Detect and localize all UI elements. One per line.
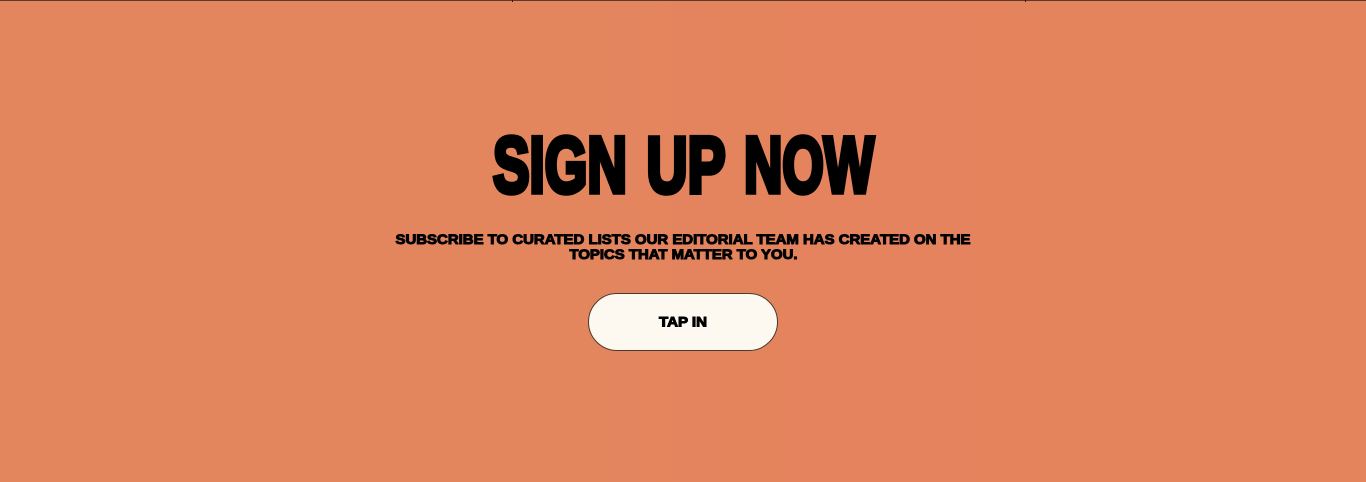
subtitle text — [396, 231, 970, 262]
title — [493, 120, 874, 209]
title: SIGN — [493, 120, 627, 209]
title: NOW — [744, 120, 874, 209]
button: tap in: TAP IN — [659, 314, 707, 330]
title: UP — [646, 120, 726, 209]
subtitle text: TOPICS THAT MATTER TO YOU. — [570, 246, 798, 262]
button: tap in — [588, 294, 778, 350]
subtitle text: SUBSCRIBE TO CURATED LISTS OUR EDITORIAL TEAM HAS CREATED ON THE — [396, 231, 970, 247]
